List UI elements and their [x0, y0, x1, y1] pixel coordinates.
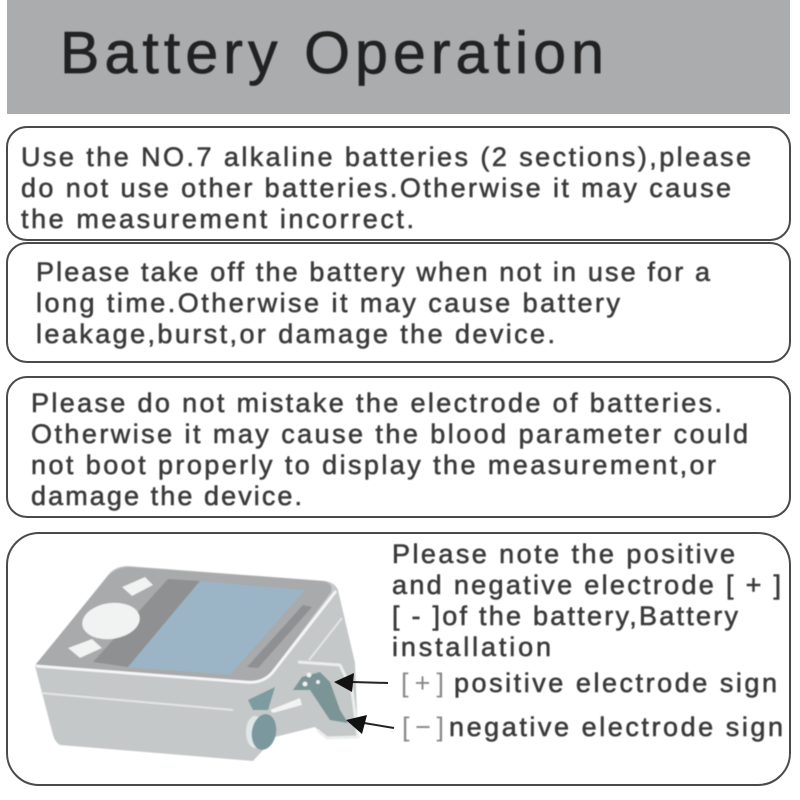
panel: electrode warning: Otherwise it may cause the blood parameter could — [31, 419, 748, 449]
negative electrode label: negative electrode sign — [449, 712, 783, 742]
battery contact spring — [293, 672, 348, 723]
panel: electrode warning — [7, 377, 790, 517]
battery compartment — [298, 662, 358, 738]
panel: electrode warning: Please do not mistake the electrode of batteries. — [31, 388, 722, 418]
negative electrode label: [−] — [402, 712, 444, 742]
panel: remove battery warning: leakage,burst,or damage the device. — [36, 319, 555, 349]
installation note: installation — [392, 632, 551, 662]
positive electrode label: positive electrode sign — [454, 668, 777, 698]
installation note — [392, 539, 781, 662]
panel: remove battery warning: Please take off the battery when not in use for a — [36, 257, 711, 287]
panel: battery type warning — [7, 127, 790, 240]
device top face — [36, 567, 332, 681]
panel: electrode warning: not boot properly to display the measurement,or — [31, 450, 716, 480]
positive electrode label: [+] — [401, 668, 444, 698]
panel: battery type warning: the measurement incorrect. — [21, 204, 414, 234]
arrow: negative electrode — [346, 715, 394, 734]
header band — [7, 0, 790, 114]
panel: remove battery warning: long time.Otherwise it may cause battery — [36, 288, 620, 318]
installation note: [ - ]of the battery,Battery — [392, 601, 738, 631]
panel: battery type warning: Use the NO.7 alkaline batteries (2 sections),please — [21, 142, 751, 172]
installation note: Please note the positive — [392, 539, 735, 569]
panel: remove battery warning — [7, 243, 790, 362]
device body — [35, 566, 358, 761]
installation note: and negative electrode [ + ] — [392, 570, 781, 600]
illustration: blood pressure device with open battery compartment — [35, 566, 358, 761]
panel: battery type warning: do not use other batteries.Otherwise it may cause — [21, 173, 731, 203]
display screen — [93, 579, 200, 667]
battery ends — [248, 687, 275, 710]
panel: battery installation — [7, 533, 790, 785]
panel: electrode warning: damage the device. — [31, 481, 302, 511]
control buttons — [122, 577, 153, 596]
title: Battery Operation — [60, 20, 604, 86]
arrow: positive electrode — [334, 673, 388, 692]
